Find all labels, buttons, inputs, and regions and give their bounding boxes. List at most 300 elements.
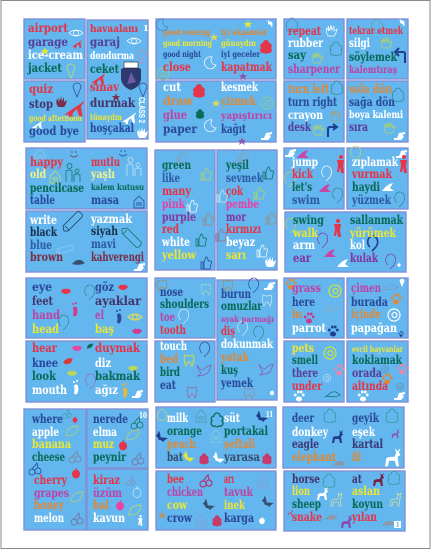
word list: touch bbox=[160, 338, 187, 353]
word list: in bbox=[292, 306, 302, 321]
word list: sheep bbox=[292, 496, 321, 511]
word list: garaj bbox=[90, 34, 120, 49]
word list: vurmak bbox=[351, 166, 392, 181]
panel: nerede words bbox=[87, 409, 148, 468]
word list: yüzmek bbox=[351, 192, 391, 207]
icons bbox=[177, 151, 214, 269]
word list: like bbox=[162, 170, 180, 185]
word list: peach bbox=[167, 436, 196, 451]
word list bbox=[161, 157, 197, 262]
card background bbox=[155, 278, 215, 338]
word list: jump bbox=[291, 154, 318, 169]
word list: kalem kutusu bbox=[91, 183, 144, 193]
word list: günaydın bbox=[221, 38, 256, 49]
card background bbox=[156, 19, 276, 79]
word list: under bbox=[292, 378, 322, 393]
card background bbox=[283, 407, 404, 468]
icons bbox=[29, 410, 83, 525]
word list: orange bbox=[167, 423, 202, 438]
word list: geyik bbox=[352, 410, 379, 425]
word list: chicken bbox=[167, 484, 203, 499]
icons bbox=[358, 364, 408, 402]
word list: cheese bbox=[32, 449, 65, 464]
icons bbox=[286, 218, 401, 269]
icons bbox=[156, 19, 272, 80]
word list: evcil hayvanlar bbox=[352, 345, 403, 355]
word list: eat bbox=[160, 377, 176, 392]
icons bbox=[193, 84, 273, 145]
panel: swing words bbox=[285, 212, 406, 272]
word list: siyah bbox=[91, 223, 118, 238]
word list: kick bbox=[292, 166, 313, 181]
icons bbox=[35, 149, 144, 208]
word list: here bbox=[292, 294, 315, 309]
word list: nose bbox=[160, 284, 183, 299]
panel: colours words bbox=[155, 150, 215, 270]
word list: red bbox=[162, 221, 179, 236]
word list bbox=[292, 340, 322, 393]
word list: feet bbox=[32, 293, 53, 308]
word list: yarasa bbox=[223, 449, 260, 464]
word list: papağan bbox=[351, 320, 397, 335]
word list: hand bbox=[32, 307, 60, 322]
word list bbox=[291, 154, 320, 207]
word list bbox=[351, 154, 398, 207]
word list bbox=[32, 279, 141, 336]
word list: hear bbox=[32, 340, 57, 355]
word list: where bbox=[31, 411, 63, 426]
word list: garage bbox=[28, 34, 68, 49]
word list: arı bbox=[224, 471, 234, 486]
icons bbox=[216, 151, 276, 267]
word list: glue bbox=[163, 107, 187, 122]
word list: yaşlı bbox=[90, 166, 115, 181]
icons bbox=[154, 409, 272, 465]
badge bbox=[121, 62, 141, 90]
word list: tekrar etmek bbox=[349, 25, 403, 37]
card background bbox=[217, 280, 277, 400]
word list: tünaydın bbox=[90, 112, 122, 123]
word list bbox=[163, 79, 272, 136]
card background bbox=[155, 150, 215, 270]
word list bbox=[160, 338, 187, 392]
word list: yatak bbox=[220, 349, 249, 364]
panel: burun words bbox=[217, 278, 277, 400]
card background bbox=[347, 19, 408, 79]
panel: sola dön words bbox=[347, 81, 408, 142]
word list: paper bbox=[163, 121, 197, 136]
word list: many bbox=[162, 183, 192, 198]
panel: milk words bbox=[154, 407, 276, 468]
word list: swing bbox=[293, 212, 324, 227]
word list: good night bbox=[163, 50, 201, 60]
word list: kuş bbox=[221, 362, 238, 377]
word list: durmak bbox=[90, 95, 135, 110]
panel: horse words bbox=[284, 471, 405, 531]
word list bbox=[292, 410, 383, 464]
card background bbox=[156, 81, 276, 142]
word list bbox=[220, 286, 275, 390]
card background bbox=[26, 278, 147, 338]
word list: silgi bbox=[349, 35, 370, 50]
card number: 1 bbox=[396, 522, 400, 529]
word list: kesmek bbox=[221, 79, 258, 94]
panel: grass words bbox=[284, 278, 344, 338]
word list: fil bbox=[352, 449, 361, 464]
word list: koyun bbox=[352, 496, 383, 511]
card background bbox=[284, 278, 344, 338]
panel: çimen words bbox=[347, 278, 408, 338]
word list: table bbox=[30, 192, 55, 207]
word list: kırmızı bbox=[226, 221, 261, 236]
icons bbox=[184, 342, 211, 398]
word list: head bbox=[32, 321, 59, 336]
word list: muz bbox=[93, 436, 114, 451]
word list: zıplamak bbox=[352, 154, 398, 169]
word list: boya kalemi bbox=[349, 109, 403, 121]
word list: there bbox=[292, 365, 318, 380]
word list: kalemtıraş bbox=[349, 64, 397, 76]
word list: aslan bbox=[352, 483, 380, 498]
panel: cut words bbox=[156, 79, 276, 145]
word list: süt bbox=[224, 410, 240, 425]
word list bbox=[160, 284, 209, 337]
word list: göz bbox=[95, 279, 114, 294]
word list: lion bbox=[292, 483, 310, 498]
word list: kartal bbox=[352, 436, 383, 451]
panel: tekrar etmek words bbox=[347, 19, 408, 79]
card background bbox=[284, 341, 344, 402]
word list: ice-cream bbox=[28, 47, 83, 62]
card background bbox=[347, 148, 408, 209]
panel: hear words bbox=[26, 340, 147, 402]
panel: havaalanı words bbox=[87, 20, 149, 139]
card number: 11 bbox=[266, 410, 273, 420]
word list: sharpener bbox=[288, 61, 340, 76]
word list: let's bbox=[292, 179, 312, 194]
word list: knee bbox=[32, 355, 58, 370]
icons bbox=[56, 212, 145, 271]
word list: jacket bbox=[27, 60, 62, 75]
icons bbox=[313, 81, 343, 137]
word list: bed bbox=[160, 351, 178, 366]
word list: yeşil bbox=[225, 157, 249, 172]
word list: write bbox=[29, 212, 57, 227]
panel: kiraz words bbox=[87, 469, 148, 530]
word list: swim bbox=[292, 192, 320, 207]
word list: kavun bbox=[93, 510, 125, 525]
icons bbox=[383, 279, 404, 337]
word list: elephant bbox=[292, 449, 336, 464]
card background bbox=[285, 212, 406, 272]
word list: cut bbox=[163, 79, 181, 94]
word list: burun bbox=[221, 286, 251, 301]
word list: çok bbox=[226, 183, 243, 198]
word list: pencilcase bbox=[30, 180, 84, 195]
card background bbox=[155, 341, 215, 402]
word list: white bbox=[161, 234, 190, 249]
word list: yürümek bbox=[349, 225, 396, 240]
panel: bee words bbox=[156, 471, 276, 530]
word list bbox=[29, 211, 144, 264]
word list bbox=[167, 471, 254, 525]
card background bbox=[156, 407, 276, 468]
icons bbox=[63, 344, 143, 398]
word list: mor bbox=[226, 209, 246, 224]
panel: airport words bbox=[24, 19, 85, 79]
word list bbox=[225, 157, 263, 262]
icons bbox=[294, 347, 345, 402]
word list: pembe bbox=[226, 196, 259, 211]
word list bbox=[32, 340, 140, 397]
card background bbox=[217, 150, 277, 270]
word list bbox=[93, 472, 125, 525]
word list: crow bbox=[167, 510, 193, 525]
word list: blue bbox=[30, 237, 52, 252]
word list: çizmek bbox=[221, 93, 256, 108]
word list: shoulders bbox=[160, 296, 209, 311]
word list: eşek bbox=[352, 424, 375, 439]
word list: banana bbox=[32, 436, 71, 451]
word list: quiz bbox=[29, 81, 53, 96]
word list: close bbox=[163, 59, 191, 74]
word list: çimen bbox=[351, 280, 381, 295]
word list: ear bbox=[293, 250, 311, 265]
word list: baş bbox=[95, 321, 114, 336]
word list: purple bbox=[162, 209, 196, 224]
word list: grapes bbox=[34, 485, 69, 500]
panel: repeat words bbox=[284, 18, 344, 79]
word list: mutlu bbox=[91, 154, 120, 169]
word list: eye bbox=[32, 279, 52, 294]
card background bbox=[284, 19, 344, 79]
word list: toe bbox=[160, 309, 175, 324]
card background bbox=[87, 409, 148, 468]
word list: mavi bbox=[91, 236, 116, 251]
panel: quiz words bbox=[24, 81, 85, 142]
card background bbox=[284, 81, 344, 142]
word list: beyaz bbox=[226, 234, 255, 249]
word list: havaalanı bbox=[90, 23, 138, 35]
word list: kulak bbox=[350, 250, 378, 265]
word list: masa bbox=[91, 192, 119, 207]
word list: el bbox=[95, 307, 104, 322]
word list: turn right bbox=[288, 94, 337, 109]
word list: iyi geceler bbox=[221, 50, 260, 60]
icons bbox=[288, 471, 401, 528]
panel: deer words bbox=[283, 407, 404, 468]
word list: inek bbox=[224, 497, 245, 512]
panel: evcil hayvanlar words bbox=[347, 341, 408, 402]
icons bbox=[119, 417, 144, 465]
word list: kapatmak bbox=[221, 59, 272, 74]
card background bbox=[347, 341, 408, 402]
word list: portakal bbox=[224, 423, 268, 438]
card background bbox=[24, 81, 85, 142]
word list bbox=[93, 411, 128, 464]
card background bbox=[26, 211, 147, 272]
word list: sola dön bbox=[349, 81, 392, 96]
word list bbox=[27, 20, 83, 75]
word list: good morning bbox=[163, 39, 212, 49]
word list: rubber bbox=[288, 35, 323, 50]
word list: ayaklar bbox=[95, 293, 141, 308]
word list: pets bbox=[292, 340, 314, 355]
word list: yazmak bbox=[90, 211, 132, 226]
word list bbox=[288, 23, 340, 76]
word list: honey bbox=[34, 497, 65, 512]
word list: turn left bbox=[288, 81, 329, 96]
word list: duymak bbox=[95, 340, 140, 355]
word list: yılan bbox=[351, 509, 377, 524]
icons bbox=[371, 19, 405, 63]
word list: üzüm bbox=[93, 485, 122, 500]
card background bbox=[24, 19, 85, 79]
word list: burada bbox=[351, 294, 388, 309]
icons bbox=[41, 30, 83, 78]
word list: at bbox=[352, 471, 362, 486]
word list: walk bbox=[292, 225, 318, 240]
icons bbox=[116, 477, 142, 526]
word list: yemek bbox=[220, 375, 253, 390]
word list bbox=[292, 280, 326, 335]
card background bbox=[26, 341, 147, 402]
card background bbox=[284, 148, 344, 209]
word list bbox=[163, 28, 272, 74]
word list: eagle bbox=[292, 436, 319, 451]
word list: kahverengi bbox=[91, 249, 144, 264]
word list: bird bbox=[160, 364, 180, 379]
panel: fruit words bbox=[24, 409, 86, 530]
icons bbox=[286, 278, 341, 336]
word list: dondurma bbox=[90, 50, 134, 62]
word list: donkey bbox=[292, 424, 329, 439]
word list: cow bbox=[167, 497, 188, 512]
word list: old bbox=[30, 166, 46, 181]
word list: söylemek bbox=[349, 49, 397, 64]
panel: zıplamak words bbox=[347, 146, 408, 209]
word list: içinde bbox=[351, 306, 381, 321]
word list: brown bbox=[30, 249, 63, 264]
icons bbox=[91, 38, 148, 138]
word list: bakmak bbox=[95, 368, 140, 383]
word list: cherry bbox=[34, 472, 68, 487]
word list bbox=[29, 81, 82, 138]
panel: happy words bbox=[26, 148, 147, 209]
word list: say bbox=[288, 47, 307, 62]
word list: good afternoon bbox=[29, 114, 82, 124]
word list: orada bbox=[352, 365, 382, 380]
icons bbox=[285, 149, 344, 203]
word list: sağa dön bbox=[349, 94, 395, 109]
word list bbox=[31, 411, 71, 525]
card number: 1 bbox=[143, 24, 149, 34]
word list: stop bbox=[29, 96, 53, 111]
word list bbox=[349, 81, 403, 134]
word list: sevmek bbox=[226, 170, 263, 185]
icons bbox=[223, 278, 275, 399]
word list: hoşçakal bbox=[90, 120, 134, 135]
word list: good evening bbox=[163, 28, 210, 38]
icons bbox=[324, 409, 400, 466]
panel: pets words bbox=[284, 340, 345, 402]
word list: sallanmak bbox=[350, 212, 403, 227]
word list: elma bbox=[93, 424, 117, 439]
word list: mouth bbox=[32, 382, 67, 397]
word list bbox=[349, 25, 403, 76]
word list: crayon bbox=[288, 107, 323, 122]
word list: sıra bbox=[349, 119, 368, 134]
word list: sınav bbox=[90, 79, 120, 94]
icons bbox=[158, 475, 274, 527]
word list: horse bbox=[292, 471, 320, 486]
word list: omuzlar bbox=[221, 298, 262, 313]
word list bbox=[30, 154, 144, 207]
word list: arm bbox=[293, 237, 315, 252]
card background bbox=[284, 471, 405, 531]
word list: kağıt bbox=[221, 121, 246, 136]
word list: desk bbox=[288, 119, 311, 134]
word list: koklamak bbox=[352, 352, 402, 367]
icons bbox=[286, 18, 342, 63]
panel: jump words bbox=[284, 148, 344, 209]
class label: CLASS 2 bbox=[137, 97, 147, 123]
card background bbox=[156, 471, 276, 530]
panel: renkler words bbox=[216, 150, 277, 270]
word list: bee bbox=[167, 471, 184, 486]
word list: good bye bbox=[29, 123, 79, 138]
word list: diş bbox=[221, 323, 235, 338]
word list: ceket bbox=[90, 61, 119, 76]
word list: diz bbox=[95, 355, 111, 370]
word list: yapıştırıcı bbox=[220, 110, 272, 122]
word list: milk bbox=[167, 410, 188, 425]
word list bbox=[292, 471, 383, 524]
word list: repeat bbox=[288, 23, 321, 38]
word list: haydi bbox=[352, 179, 380, 194]
card background bbox=[347, 81, 408, 142]
word list: şeftali bbox=[224, 436, 255, 451]
word list: ağız bbox=[95, 382, 118, 397]
word list bbox=[292, 212, 403, 265]
icons bbox=[59, 285, 142, 334]
panel: greetings words bbox=[156, 19, 276, 80]
word list: airport bbox=[28, 20, 68, 35]
card background bbox=[347, 278, 408, 338]
card background bbox=[26, 148, 147, 209]
word list: nerede bbox=[93, 411, 128, 426]
panel: eye words bbox=[26, 278, 147, 338]
word list: deer bbox=[292, 410, 314, 425]
word list: bat bbox=[167, 449, 183, 464]
word list: ayak parmağı bbox=[221, 315, 275, 325]
word list: yellow bbox=[161, 247, 197, 262]
word list: draw bbox=[163, 93, 194, 108]
icons bbox=[31, 83, 84, 130]
word list: iyi akşamlar bbox=[221, 28, 267, 38]
word list bbox=[288, 81, 337, 134]
card background bbox=[87, 20, 148, 139]
word list: apple bbox=[32, 424, 59, 439]
word list: black bbox=[30, 224, 57, 239]
word list: tooth bbox=[160, 322, 186, 337]
word list: happy bbox=[30, 154, 64, 169]
word list: dokunmak bbox=[221, 336, 273, 351]
word list: tavuk bbox=[224, 484, 253, 499]
word list bbox=[167, 410, 268, 464]
card number: 10 bbox=[139, 411, 147, 421]
panel: write words bbox=[26, 211, 147, 272]
